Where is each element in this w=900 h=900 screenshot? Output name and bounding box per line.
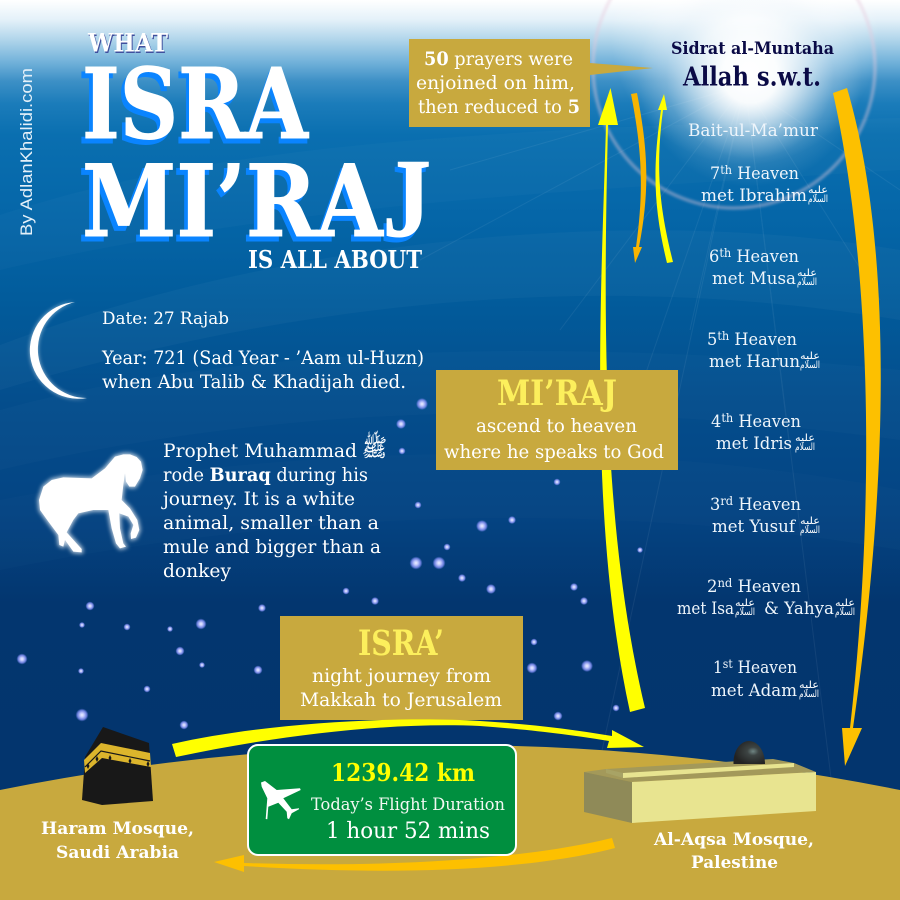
stars	[16, 398, 643, 730]
icon: Al-Aqsa Mosque	[584, 741, 816, 823]
label: Al-Aqsa Mosque: Al-Aqsa Mosque,	[653, 830, 814, 850]
panel: flight distance	[248, 745, 516, 855]
label: 2nd heaven: Heaven	[732, 577, 801, 597]
title: ISRA: ISRA	[82, 47, 309, 161]
panel: Isra'	[280, 616, 523, 720]
arrow: descent (large orange)	[833, 88, 881, 766]
label: 5th heaven: met Harun	[709, 352, 800, 372]
label: 6th heaven: met Musa	[712, 269, 796, 289]
label: 5th heaven: th	[717, 329, 730, 343]
callout: 50 prayers: 50 prayers were	[424, 49, 573, 70]
label: 2nd heaven: nd	[717, 576, 733, 590]
label: 7th heaven: met Ibrahim	[701, 186, 807, 206]
text: Buraq description: donkey	[163, 561, 232, 582]
title: is all about: IS ALL ABOUT	[248, 245, 422, 274]
label: 5th heaven: 5	[707, 330, 718, 350]
icon: Buraq white horse	[39, 454, 143, 552]
label: 3rd heaven: met Yusuf	[712, 517, 797, 537]
arrow: return journey (orange)	[214, 838, 615, 872]
arrow: small orange down	[631, 93, 646, 263]
label: 4th heaven: th	[721, 411, 734, 425]
label: 5th heaven: عليه	[800, 351, 820, 362]
label: 3rd heaven: عليه	[800, 516, 820, 527]
callout: 50 prayers: enjoined on him,	[416, 73, 575, 94]
label: 7th heaven: 7	[710, 164, 721, 184]
ground	[0, 745, 900, 900]
title: WHAT: WHAT	[88, 30, 169, 59]
label: 6th heaven: 6	[709, 247, 720, 267]
label: 7th heaven: Heaven	[732, 164, 799, 184]
label: 4th heaven: عليه	[795, 433, 815, 444]
label: 2nd heaven: السلام	[735, 607, 755, 618]
label: Haram Mosque: Haram Mosque,	[41, 819, 194, 839]
heading: Sidrat al-Muntaha	[671, 39, 834, 92]
label: Al-Aqsa Mosque: Palestine	[691, 853, 778, 873]
arrow: small yellow up	[655, 94, 673, 263]
label: 4th heaven: met Idris	[716, 434, 792, 454]
title: MI'RAJ: MI’RAJ	[82, 137, 431, 261]
label: 2nd heaven: 2	[707, 577, 718, 597]
title: MI'RAJ: MI’RAJ	[78, 142, 428, 266]
title: WHAT: WHAT	[87, 28, 168, 58]
text: date and year: Year: 721 (Sad Year - ’Aam ul-Huzn)	[101, 348, 424, 369]
label: 3rd heaven: 3	[710, 495, 721, 515]
text: Buraq description: mule and bigger than a	[163, 537, 381, 558]
label: 3rd heaven: Heaven	[733, 495, 801, 515]
label: 1st heaven: st	[723, 657, 733, 671]
label: 3rd heaven: rd	[720, 494, 733, 508]
label: Al-Aqsa Mosque	[653, 830, 814, 873]
label: 2nd heaven	[677, 576, 855, 619]
panel: Isra': ISRA’	[358, 623, 444, 664]
panel: flight distance: 1239.42 km	[331, 758, 475, 787]
label: Haram Mosque: Saudi Arabia	[56, 843, 179, 863]
label: 1st heaven: Heaven	[733, 658, 797, 678]
label: 1st heaven: السلام	[799, 689, 819, 700]
label: 7th heaven: عليه	[808, 185, 828, 196]
label: 4th heaven	[711, 411, 815, 454]
label: 5th heaven: Heaven	[729, 330, 797, 350]
arrow: Isra' journey (yellow)	[172, 719, 644, 757]
label: 4th heaven: 4	[711, 412, 722, 432]
panel: Mi'raj: where he speaks to God	[444, 442, 664, 463]
text: date and year: Date: 27 Rajab	[102, 309, 229, 329]
label: 5th heaven	[707, 329, 820, 372]
label: 2nd heaven: عليه	[835, 598, 855, 609]
label: Bait-ul-Ma'mur: Bait-ul-Ma’mur	[688, 121, 819, 141]
title	[78, 28, 431, 274]
label: 3rd heaven: السلام	[800, 525, 820, 536]
label: 6th heaven: Heaven	[731, 247, 799, 267]
icon: Kaaba	[82, 727, 153, 805]
label: 1st heaven: met Adam	[711, 681, 797, 701]
label: Haram Mosque	[41, 819, 194, 863]
label: 7th heaven: السلام	[808, 194, 828, 205]
text: Buraq description: Prophet Muhammad	[163, 441, 357, 462]
label: 2nd heaven: & Yahya	[764, 599, 834, 619]
label: 4th heaven: السلام	[795, 442, 815, 453]
label: 6th heaven: السلام	[797, 277, 817, 288]
title: ISRA: ISRA	[78, 52, 307, 166]
label: 2nd heaven: عليه	[735, 598, 755, 609]
label: 1st heaven: عليه	[799, 680, 819, 691]
label: 7th heaven	[701, 163, 828, 206]
icon: crescent moon	[30, 302, 87, 399]
text: Buraq description: animal, smaller than a	[163, 513, 379, 534]
text: Buraq description	[161, 430, 387, 582]
label: 2nd heaven: met Isa	[677, 599, 734, 619]
icon: plane	[261, 781, 301, 819]
panel: flight distance: 1 hour 52 mins	[326, 819, 490, 844]
list: heavens	[677, 121, 855, 701]
panel: Mi'raj: ascend to heaven	[476, 416, 637, 437]
panel: Isra': Makkah to Jerusalem	[300, 690, 502, 711]
label: 5th heaven: السلام	[800, 360, 820, 371]
label: 2nd heaven: السلام	[835, 607, 855, 618]
label: 6th heaven: th	[719, 246, 732, 260]
text: Buraq description: ﷺ	[362, 430, 387, 462]
text: Buraq description: journey. It is a white	[161, 489, 355, 510]
panel: Isra': night journey from	[312, 666, 491, 687]
text: date and year	[101, 309, 424, 393]
label: 6th heaven: عليه	[797, 268, 817, 279]
label: 4th heaven: Heaven	[733, 412, 801, 432]
heading: Sidrat al-Muntaha: Sidrat al-Muntaha	[671, 39, 834, 59]
text: date and year: when Abu Talib & Khadijah died.	[102, 372, 406, 393]
light rays and glow around Allah s.w.t.	[420, 0, 900, 810]
credit: By AdlanKhalidi.com	[17, 68, 36, 236]
panel: flight distance: Today’s Flight Duration	[311, 795, 505, 815]
panel: Mi'raj: MI’RAJ	[497, 373, 617, 414]
callout: 50 prayers: then reduced to 5	[418, 97, 580, 118]
text: Buraq description: rode Buraq during his	[163, 465, 368, 486]
label: 6th heaven	[709, 246, 817, 289]
label: 7th heaven: th	[720, 163, 732, 177]
callout: 50 prayers	[409, 39, 653, 127]
arrow: Mi'raj ascent (yellow)	[598, 88, 645, 712]
label: 1st heaven	[711, 657, 819, 701]
label: 1st heaven: 1	[713, 658, 724, 678]
label: 3rd heaven	[710, 494, 820, 537]
heading: Allah: Allah s.w.t.	[682, 62, 821, 92]
panel: Mi'raj	[436, 370, 678, 470]
